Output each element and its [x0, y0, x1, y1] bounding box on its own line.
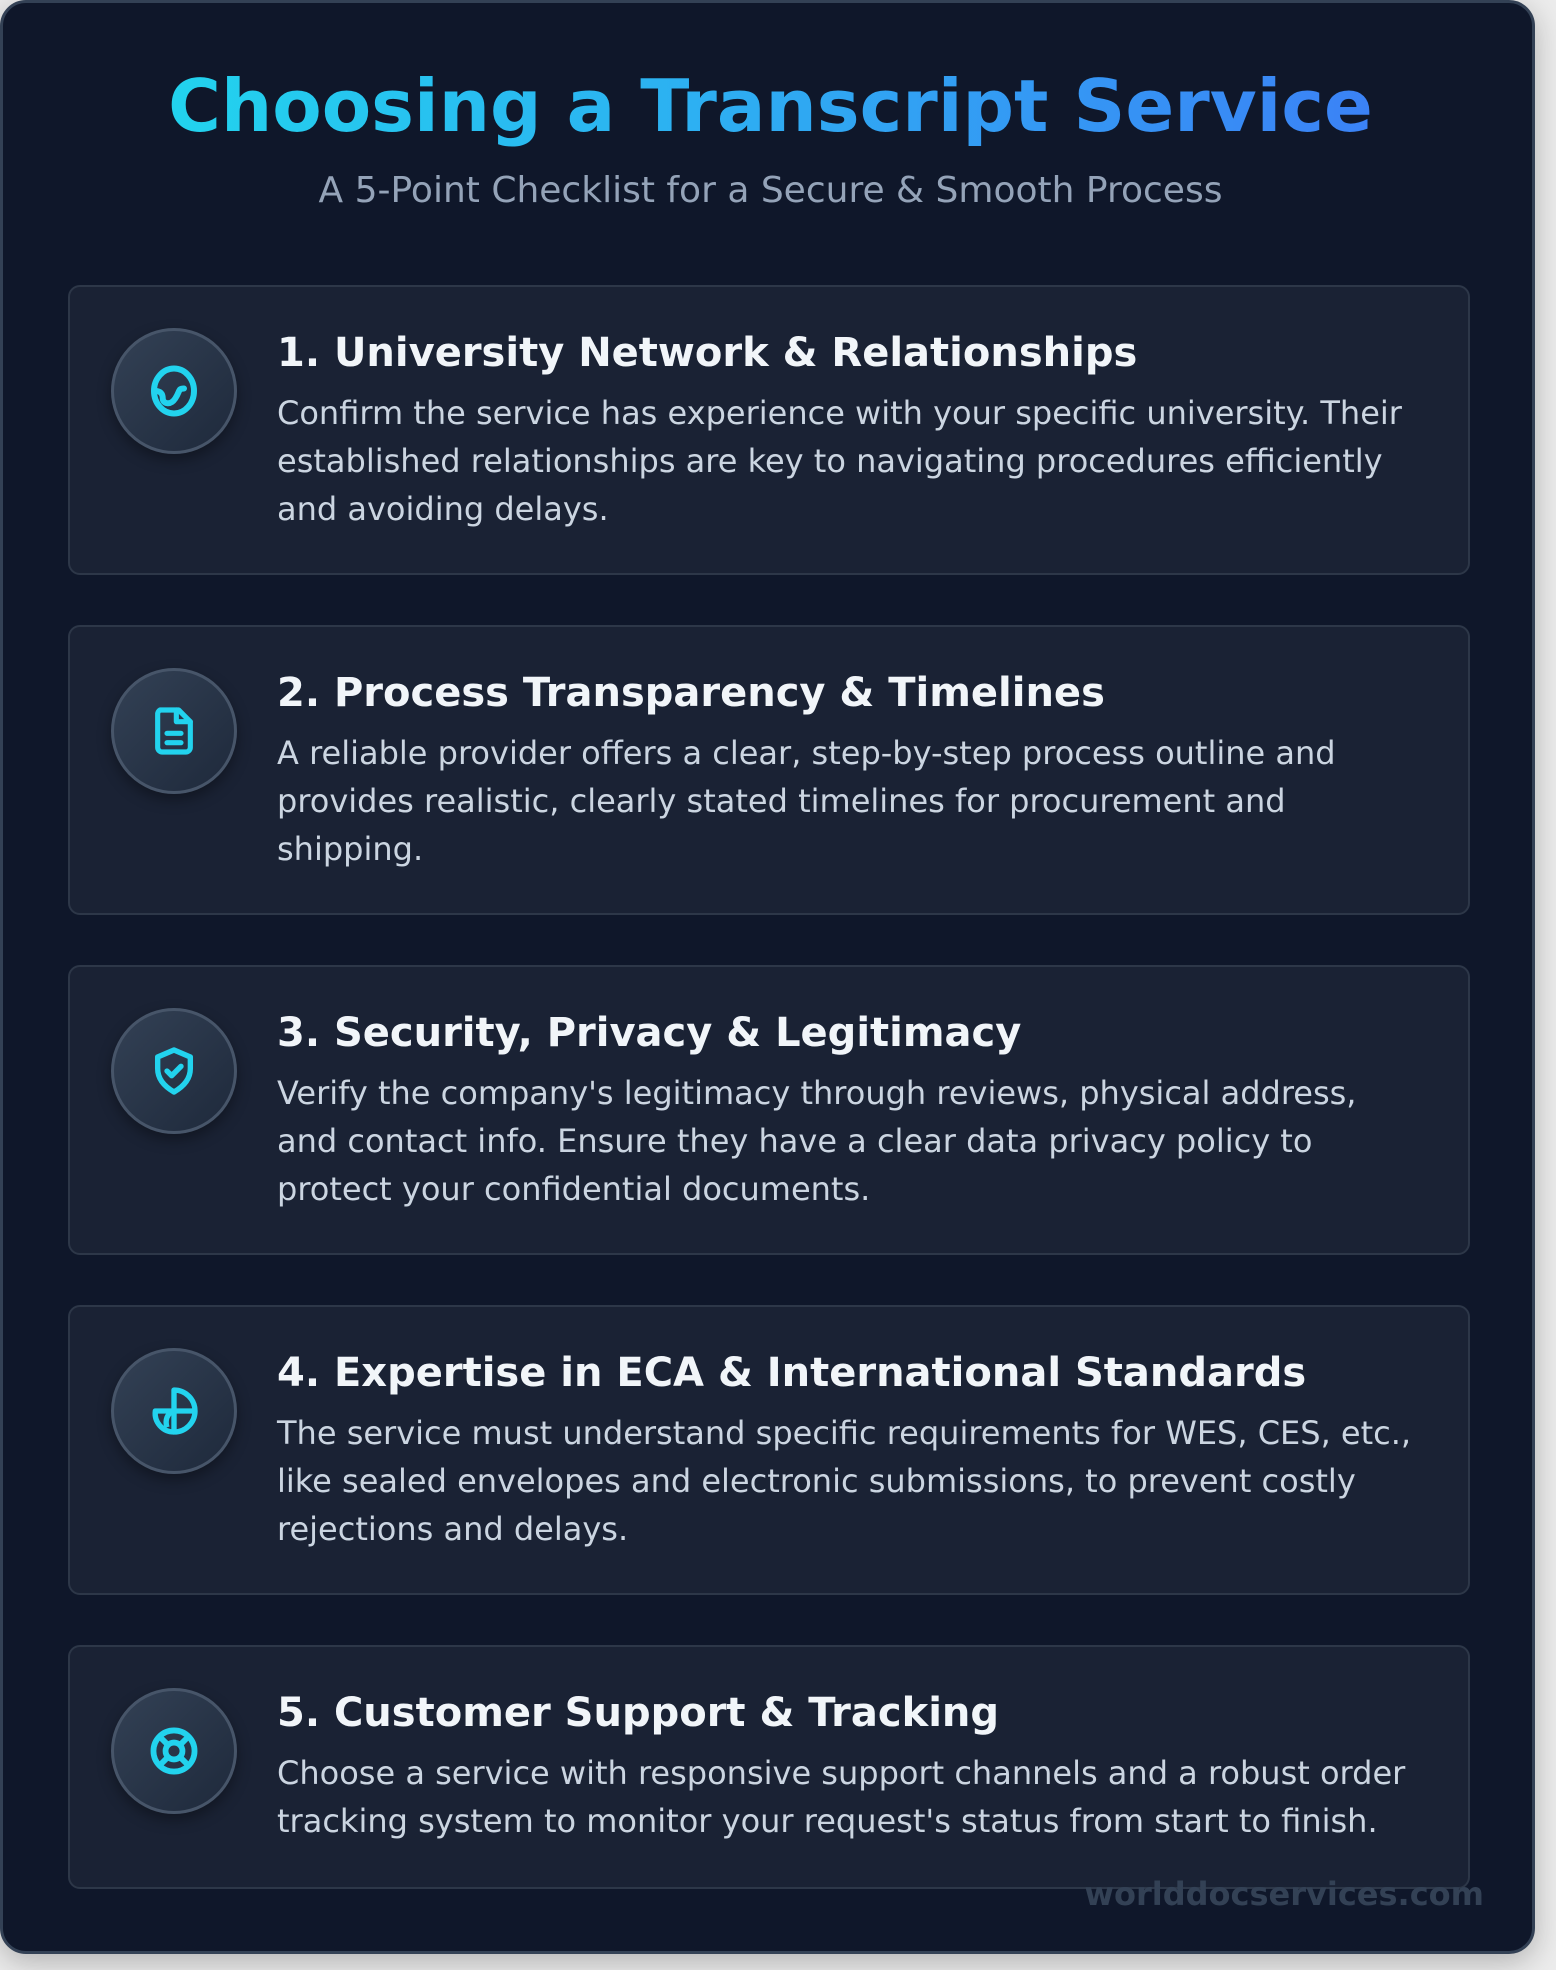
icon: document [111, 668, 237, 794]
body 2: shipping. [277, 830, 423, 868]
icon: globe [111, 328, 237, 454]
heading 5: 5. Customer Support & Tracking [277, 1690, 999, 1736]
body 3: and contact info. Ensure they have a clear data privacy policy to [277, 1122, 1312, 1160]
subtitle: A 5-Point Checklist for a Secure & Smooth Process [319, 170, 1222, 211]
body 4: The service must understand specific requirements for WES, CES, etc., [277, 1414, 1411, 1452]
panel: item 3 [68, 965, 1470, 1255]
icon: chart/leaf [111, 1348, 237, 1474]
panel: item 2 [68, 625, 1470, 915]
body 1: Confirm the service has experience with your specific university. Their [277, 394, 1402, 432]
body 4: rejections and delays. [277, 1510, 628, 1548]
panel: item 5 [68, 1645, 1470, 1889]
panel: item 1 [68, 285, 1470, 575]
body 2 [277, 734, 1336, 868]
body 3: Verify the company's legitimacy through reviews, physical address, [277, 1074, 1356, 1112]
body 1: and avoiding delays. [277, 490, 609, 528]
heading 3: 3. Security, Privacy & Legitimacy [277, 1010, 1021, 1056]
body 5: Choose a service with responsive support channels and a robust order [277, 1754, 1405, 1792]
icon: lifebuoy [111, 1688, 237, 1814]
heading 1: 1. University Network & Relationships [277, 330, 1137, 376]
body 4: like sealed envelopes and electronic submissions, to prevent costly [277, 1462, 1356, 1500]
title: Choosing a Transcript Service [168, 64, 1373, 148]
body 1: established relationships are key to navigating procedures efficiently [277, 442, 1383, 480]
body 5: tracking system to monitor your request's status from start to finish. [277, 1802, 1378, 1840]
heading 2: 2. Process Transparency & Timelines [277, 670, 1105, 716]
watermark: worlddocservices.com [1084, 1875, 1484, 1913]
body 3 [277, 1074, 1356, 1208]
body 5 [277, 1754, 1406, 1840]
body 2: A reliable provider offers a clear, step-by-step process outline and [277, 734, 1336, 772]
panel: item 4 [68, 1305, 1470, 1595]
body 3: protect your confidential documents. [277, 1170, 870, 1208]
body 4 [276, 1414, 1411, 1548]
body 2: provides realistic, clearly stated timelines for procurement and [277, 782, 1286, 820]
heading 4: 4. Expertise in ECA & International Standards [277, 1350, 1306, 1396]
body 1 [277, 394, 1402, 528]
icon: shield [111, 1008, 237, 1134]
